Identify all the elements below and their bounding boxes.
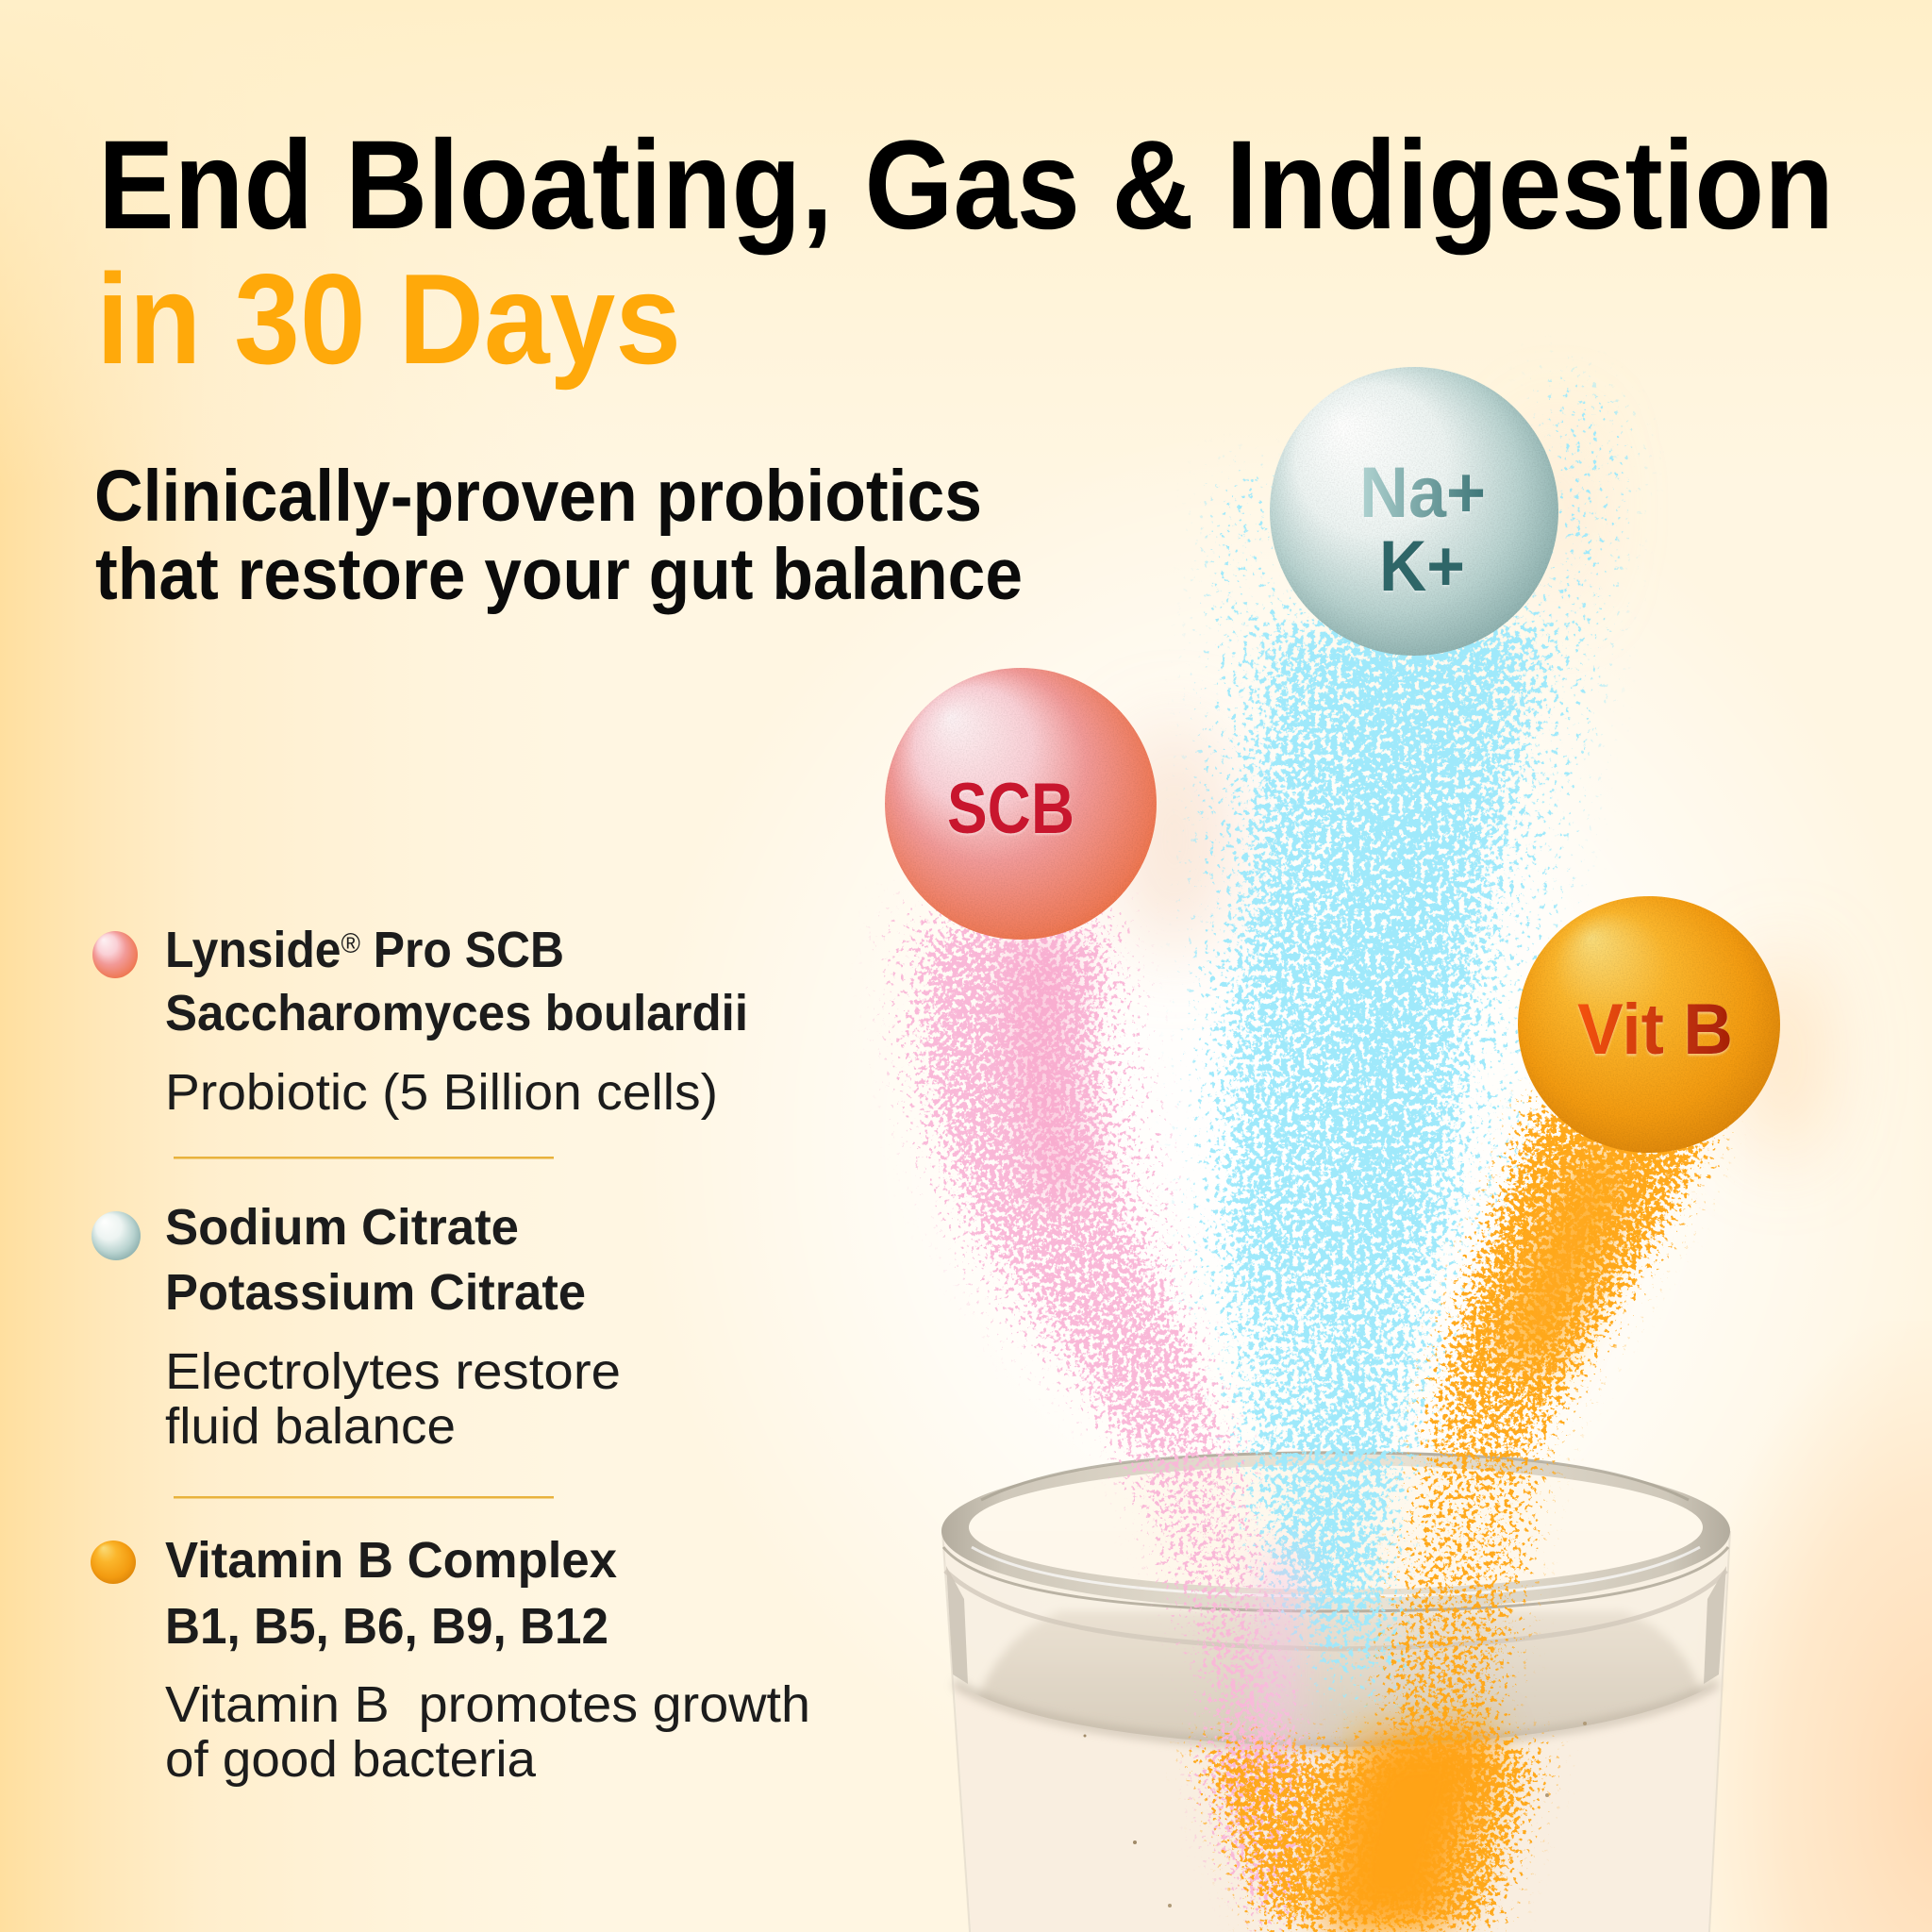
pill: SCB: SCB <box>947 769 1074 849</box>
item: Lynside Pro SCB: Pro SCB <box>360 922 564 978</box>
pill: Na+ K+: Na+ <box>1359 453 1486 533</box>
item: Lynside Pro SCB <box>92 922 748 1121</box>
item: Sodium and Potassium Citrate: Potassium Citrate <box>165 1264 586 1321</box>
item: Vitamin B Complex: B1, B5, B6, B9, B12 <box>165 1598 608 1655</box>
item: Lynside Pro SCB: Saccharomyces boulardii <box>165 985 748 1041</box>
pill: Na+ K+: K+ <box>1379 526 1465 607</box>
pill: Na+ K+ <box>1270 367 1558 656</box>
subtitle <box>94 456 1023 615</box>
item: Sodium and Potassium Citrate <box>92 1199 621 1455</box>
solid orange core in glass <box>1006 943 1632 1932</box>
glass <box>941 1451 1730 1932</box>
powder stream: orange <box>1193 1099 1717 1932</box>
item: Lynside Pro SCB: ® <box>341 928 360 959</box>
pill: Vit B: Vit B <box>1577 990 1733 1070</box>
subtitle: that restore your gut balance <box>95 534 1023 615</box>
powder stream: blue <box>1192 358 1632 1698</box>
item: Lynside Pro SCB: Probiotic (5 Billion cells) <box>165 1064 718 1121</box>
pill: SCB <box>885 668 1157 940</box>
item: Vitamin B Complex: Vitamin B promotes growth <box>165 1676 810 1733</box>
item: Sodium and Potassium Citrate: Electrolytes restore <box>165 1343 621 1400</box>
pill: Vit B <box>1518 896 1780 1153</box>
item: Vitamin B Complex: of good bacteria <box>165 1731 537 1788</box>
ball shadows <box>1118 415 1825 1160</box>
powder stream: pink <box>887 906 1311 1932</box>
item: Vitamin B Complex: Vitamin B Complex <box>165 1532 617 1589</box>
title <box>96 115 1834 391</box>
item: Sodium and Potassium Citrate: Sodium Citrate <box>165 1199 519 1256</box>
item: Sodium and Potassium Citrate: fluid balance <box>165 1398 456 1455</box>
ingredient list <box>91 922 810 1788</box>
title: in 30 Days <box>96 247 681 391</box>
item: Vitamin B Complex <box>91 1532 810 1788</box>
subtitle: Clinically-proven probiotics <box>94 456 982 537</box>
item: Lynside Pro SCB: Lynside <box>165 922 356 978</box>
